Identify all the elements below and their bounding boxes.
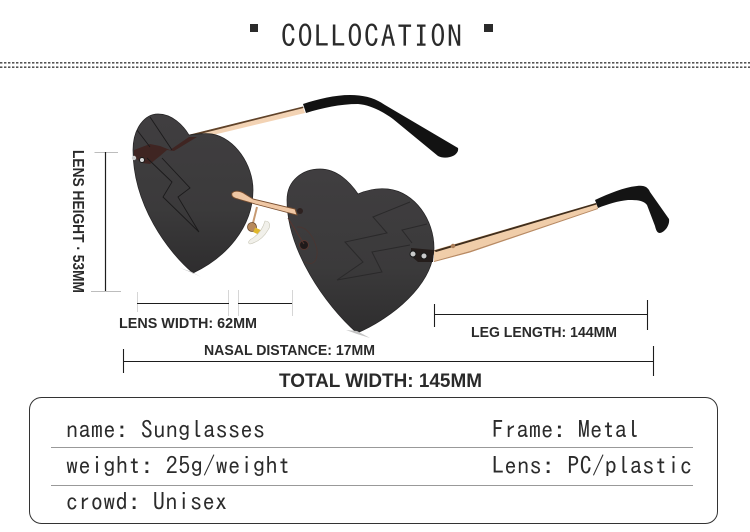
nose bridge (232, 191, 303, 215)
dimension: lens height: LENS HEIGHT · 53MM (69, 150, 86, 293)
right heart lens (287, 169, 434, 333)
title: COLLOCATION (281, 21, 462, 51)
nose pad (248, 207, 270, 244)
spec: lens: Lens: PC/plastic (492, 453, 692, 477)
spec: weight: weight: 25g/weight (66, 453, 290, 477)
spec: name: name: Sunglasses (66, 417, 265, 441)
dimension: total width (123, 346, 654, 392)
dimension: lens width (119, 290, 292, 332)
left heart lens (132, 114, 253, 273)
dimension: lens width: LENS WIDTH: 62MM (119, 315, 257, 332)
dimension: lens height (69, 150, 121, 293)
dimension: total width: TOTAL WIDTH: 145MM (279, 370, 482, 392)
sunglasses product photo (132, 95, 669, 338)
dimension: nasal distance: NASAL DISTANCE: 17MM (204, 342, 375, 359)
dimension: leg length (434, 300, 648, 341)
spec: frame: Frame: Metal (492, 417, 639, 441)
dimension: leg length: LEG LENGTH: 144MM (471, 324, 617, 341)
spec: crowd: crowd: Unisex (66, 489, 227, 513)
panel: specifications (30, 398, 718, 524)
right temple arm (434, 186, 669, 262)
left temple arm (188, 95, 458, 158)
